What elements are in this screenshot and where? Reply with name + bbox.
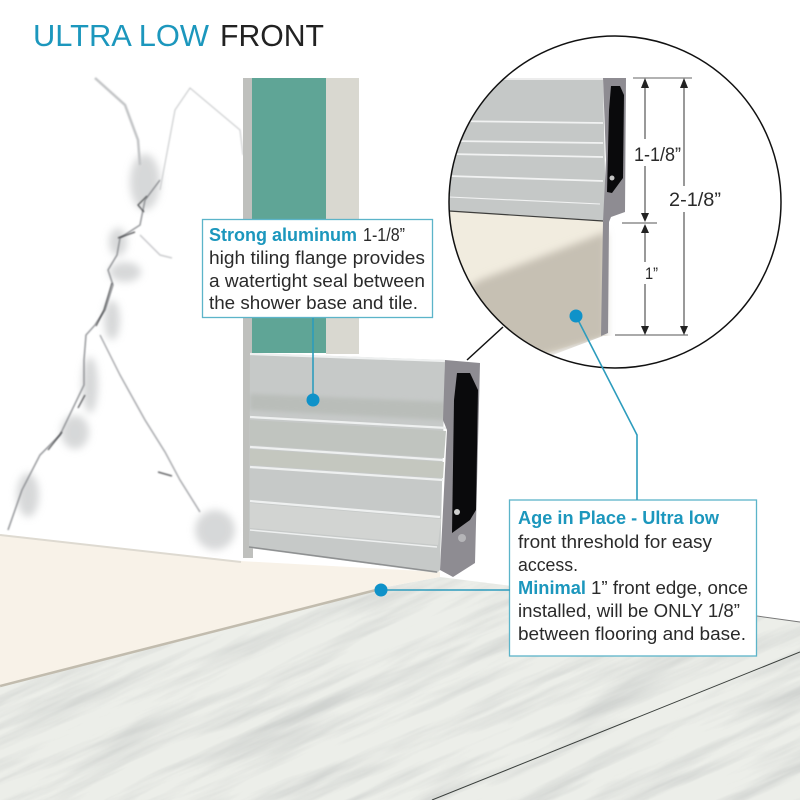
callout: aluminum flange (202, 220, 432, 318)
callout: age in place: Minimal (518, 578, 586, 598)
callout: age in place: access. (518, 555, 578, 575)
callout: aluminum flange: a watertight seal between (209, 271, 425, 291)
pointer: detail base (570, 310, 637, 500)
callout: age in place: Age in Place - Ultra low (518, 508, 720, 528)
pointer: flange (306, 318, 320, 406)
dimension label 1-1/8: 1-1/8” (634, 145, 681, 166)
callout: aluminum flange: the shower base and tile. (209, 293, 418, 313)
dimension lines (615, 78, 692, 335)
dimension label 2-1/8: 2-1/8” (669, 190, 721, 211)
marble veins (8, 78, 243, 550)
title: FRONT (220, 18, 324, 53)
callout: age in place: installed, will be ONLY 1/8” (518, 601, 740, 621)
title: ULTRA LOW (33, 18, 210, 53)
aluminum flange (249, 353, 480, 577)
wall layers: grey strip, green board, beige panel (243, 78, 359, 558)
callout: age in place: between flooring and base. (518, 624, 746, 644)
callout: aluminum flange: 1-1/8” (363, 225, 405, 245)
callout: age in place: front threshold for easy (518, 532, 712, 552)
title (33, 18, 324, 53)
slot (452, 373, 478, 533)
dimension label 1: 1” (645, 264, 658, 283)
floor marble (0, 577, 800, 800)
base edge (0, 589, 380, 686)
detail: flange face (449, 78, 606, 221)
detail circle (449, 36, 781, 375)
pointer line to circle (467, 327, 503, 360)
callout: aluminum flange: high tiling flange provides (209, 248, 425, 268)
pointer: base threshold (374, 584, 510, 596)
wall tile (0, 78, 243, 562)
callout: age in place: 1” front edge, once (591, 578, 748, 598)
callout: aluminum flange: Strong aluminum (209, 225, 357, 245)
detail: cap and slot (601, 78, 626, 336)
end cap (440, 360, 480, 577)
detail: base (450, 212, 603, 352)
callout: age in place (510, 500, 756, 656)
shower base front (0, 534, 440, 686)
